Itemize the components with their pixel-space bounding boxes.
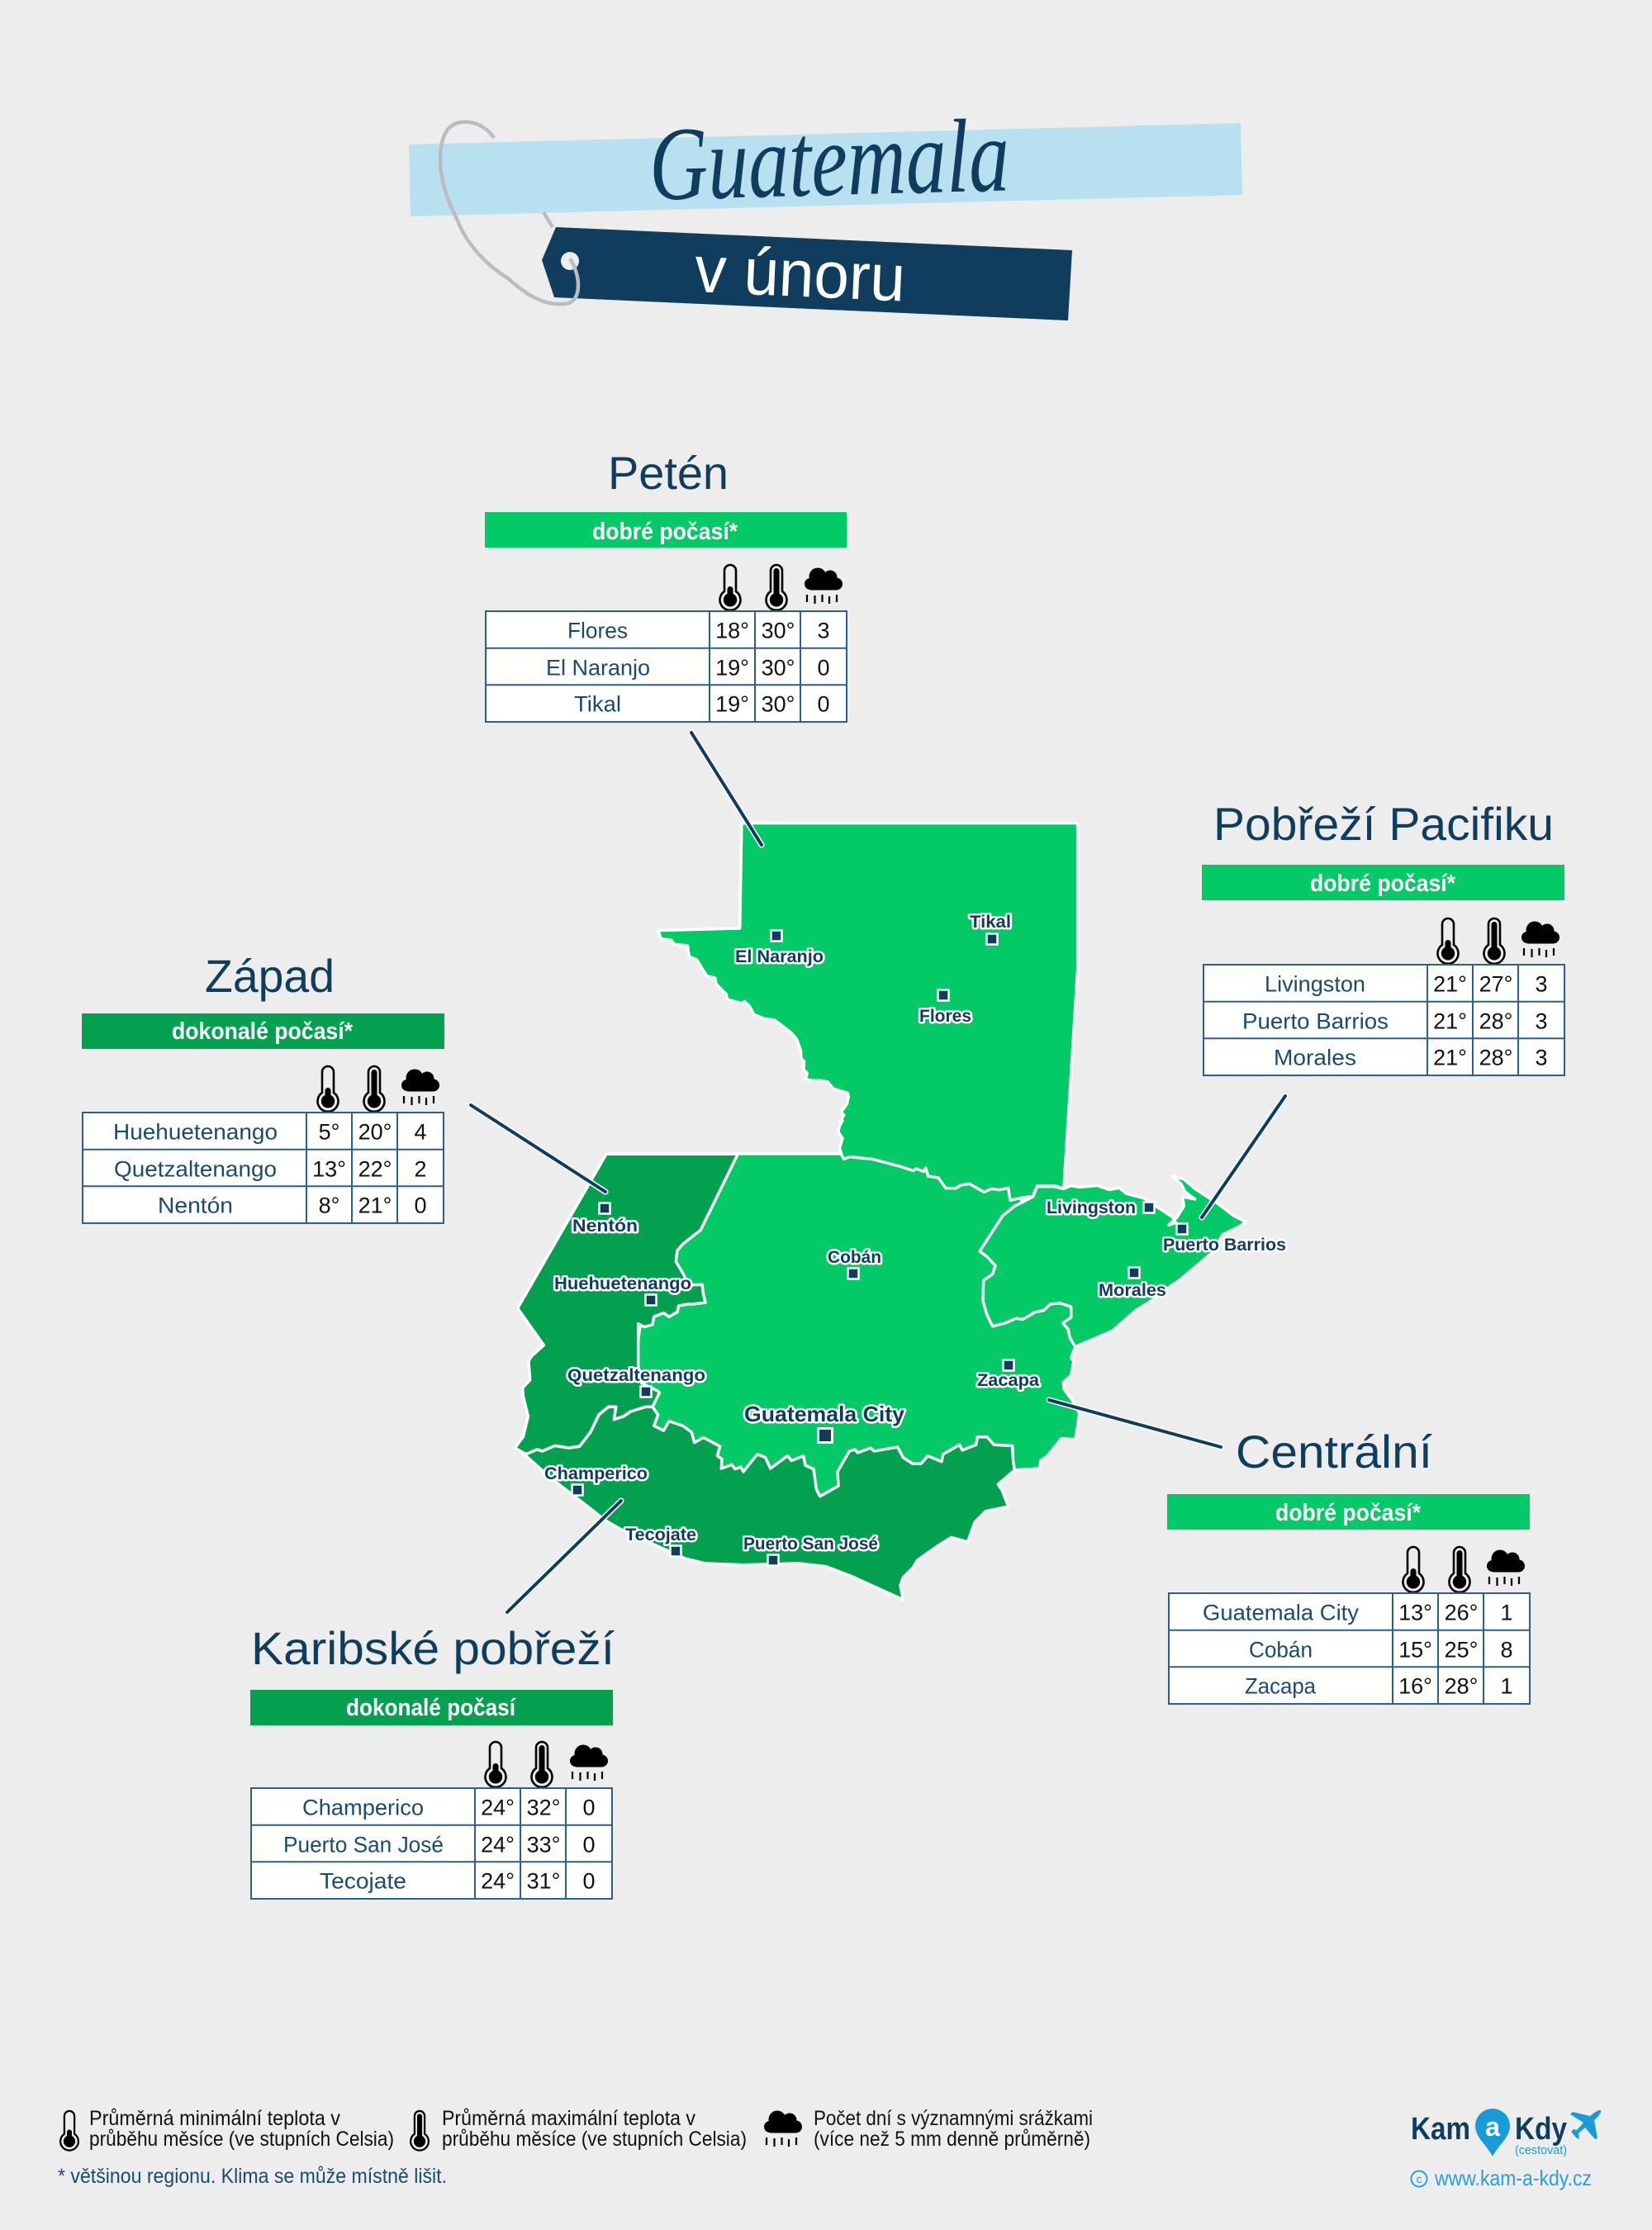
table: Guatemala City (1203, 1600, 1360, 1625)
table: Flores (567, 618, 628, 643)
table: 18° (715, 618, 749, 643)
marker: Cobán (847, 1269, 859, 1279)
table: 28° (1445, 1673, 1478, 1698)
table: Morales (1274, 1045, 1356, 1070)
table: Livingston (1265, 971, 1365, 996)
legend: rainy days (764, 2107, 1093, 2151)
label: Tecojate: Tecojate (625, 1525, 696, 1544)
table: 5° (319, 1119, 339, 1144)
copyright and website: c (1416, 2172, 1422, 2185)
table: 28° (1479, 1045, 1512, 1070)
legend: maximum temperature: průběhu měsíce (ve stupních Celsia) (442, 2128, 747, 2151)
icon: airplane (1570, 2110, 1601, 2139)
heading: Centrální: Centrální (1236, 1426, 1432, 1478)
tag string (440, 122, 578, 304)
icon: map pin (1475, 2109, 1510, 2156)
table: 3 (1535, 1008, 1548, 1033)
table (83, 1113, 444, 1223)
label: Champerico: Champerico (544, 1464, 648, 1483)
rating bar (1167, 1494, 1530, 1530)
legend: minimum temperature: Průměrná minimální teplota v (89, 2107, 340, 2130)
table: 21° (1433, 971, 1467, 996)
region: Petén (658, 823, 1078, 1200)
table: Zacapa (1245, 1673, 1317, 1698)
table: 30° (762, 691, 795, 716)
table: Quetzaltenango (114, 1156, 277, 1181)
table: 30° (762, 618, 795, 643)
rating text: dobré počasí* (592, 519, 738, 545)
legend: rainy days: (více než 5 mm denně průměrně) (814, 2128, 1090, 2151)
table (251, 1788, 612, 1899)
marker: Tecojate (671, 1546, 681, 1556)
marker: Morales (1128, 1267, 1140, 1279)
price tag (542, 227, 1072, 320)
logo letter: a: a (1485, 2112, 1500, 2142)
label: Quetzaltenango: Quetzaltenango (567, 1366, 705, 1385)
table: Tecojate (320, 1868, 406, 1893)
table: 13° (1398, 1600, 1432, 1625)
icon: rain (570, 1744, 608, 1781)
icon: max temperature (1449, 1547, 1470, 1592)
legend: rainy days: Počet dní s významnými srážkami (814, 2107, 1093, 2130)
table: 25° (1445, 1637, 1478, 1662)
icon: max temperature (532, 1742, 552, 1787)
heading: Pobřeží Pacifiku: Pobřeží Pacifiku (1213, 798, 1554, 850)
region: Centrální (617, 1154, 1085, 1519)
table: 21° (1433, 1045, 1467, 1070)
rating bar (250, 1690, 613, 1725)
icon: max temperature (767, 565, 786, 610)
table: 2 (414, 1156, 427, 1181)
table: 26° (1445, 1600, 1478, 1625)
table: 1 (1500, 1673, 1513, 1698)
table: 15° (1398, 1637, 1432, 1662)
icon: rain (1521, 922, 1559, 957)
title: Guatemala: Guatemala (648, 97, 1011, 223)
table: 0 (582, 1832, 596, 1857)
panel: Karibské pobřeží (250, 1622, 615, 1899)
marker: Guatemala City (818, 1429, 833, 1442)
footnote: * většinou regionu. Klima se může místně lišit. (58, 2165, 447, 2188)
rating text: dokonalé počasí (346, 1695, 516, 1721)
legend: maximum temperature (411, 2107, 747, 2151)
marker: Puerto San José (768, 1554, 778, 1566)
table: 21° (1433, 1008, 1467, 1033)
table: Champerico (302, 1795, 424, 1820)
table: Puerto San José (283, 1832, 444, 1857)
marker: Champerico (572, 1485, 583, 1495)
table: 31° (527, 1868, 560, 1893)
table: 28° (1479, 1008, 1512, 1033)
logo subtext: (cestovat) (1515, 2143, 1567, 2157)
region: Pobřeží Pacifiku (980, 1176, 1246, 1347)
map of Guatemala (515, 823, 1286, 1600)
logo: Kam a Kdy (1411, 2109, 1601, 2190)
label: Guatemala City: Guatemala City (744, 1402, 905, 1426)
legend: minimum temperature: průběhu měsíce (ve stupních Celsia) (89, 2128, 394, 2151)
table: 16° (1398, 1673, 1432, 1698)
table: 27° (1479, 971, 1512, 996)
table (1203, 965, 1564, 1075)
leader line: Západ (471, 1105, 605, 1192)
marker: Nentón (600, 1203, 610, 1214)
icon: max temperature (1483, 918, 1505, 964)
marker: Huehuetenango (646, 1295, 656, 1305)
table: El Naranjo (546, 655, 650, 680)
region: Západ (515, 1154, 738, 1454)
table: Cobán (1249, 1637, 1313, 1662)
label: Puerto Barrios: Puerto Barrios (1163, 1236, 1286, 1255)
icon: rain (1487, 1549, 1525, 1586)
label: El Naranjo: El Naranjo (735, 947, 824, 966)
leader line: Pobřeží Pacifiku (1202, 1096, 1285, 1217)
marker: Puerto Barrios (1176, 1224, 1188, 1234)
marker: Flores (938, 989, 948, 1001)
table: Tikal (574, 691, 621, 716)
table: 8 (1500, 1637, 1513, 1662)
table: 32° (527, 1795, 560, 1820)
heading: Karibské pobřeží: Karibské pobřeží (251, 1622, 615, 1674)
marker: Tikal (986, 933, 998, 945)
table: 3 (817, 618, 830, 643)
table: 0 (582, 1795, 596, 1820)
label: Flores: Flores (919, 1007, 971, 1026)
table: Huehuetenango (113, 1119, 278, 1144)
table: 30° (762, 655, 795, 680)
legend (58, 2107, 1093, 2188)
heading: Západ: Západ (205, 950, 335, 1002)
icon: min temperature (720, 565, 740, 610)
label: Morales: Morales (1099, 1281, 1166, 1300)
label: Nentón: Nentón (572, 1217, 638, 1236)
rating text: dobré počasí* (1310, 871, 1456, 897)
label: Tikal: Tikal (970, 913, 1011, 932)
table: 8° (319, 1193, 339, 1217)
icon: max temperature (363, 1066, 385, 1112)
label: Huehuetenango: Huehuetenango (554, 1274, 691, 1293)
table: 19° (715, 691, 749, 716)
icon: min temperature (1403, 1547, 1424, 1592)
table: 19° (715, 655, 749, 680)
tag hole (561, 252, 579, 270)
panel: Centrální (1167, 1426, 1530, 1704)
title ribbon (409, 123, 1242, 216)
title block (409, 97, 1242, 320)
table: Nentón (158, 1193, 233, 1217)
table: 1 (1500, 1600, 1513, 1625)
leader line: Karibské pobřeží (507, 1501, 621, 1612)
table: 0 (414, 1193, 427, 1217)
table: 24° (481, 1868, 515, 1893)
table: 33° (527, 1832, 560, 1857)
icon: rain (805, 568, 843, 604)
logo word: Kdy: Kdy (1515, 2112, 1567, 2147)
label: Zacapa: Zacapa (977, 1371, 1039, 1390)
rating text: dokonalé počasí* (172, 1018, 354, 1045)
rating bar (1202, 865, 1564, 900)
copyright and website: www.kam-a-kdy.cz (1434, 2166, 1592, 2190)
panel: Západ (82, 950, 444, 1223)
leader line: Centrální (1049, 1400, 1221, 1447)
marker: El Naranjo (771, 930, 781, 942)
legend: minimum temperature (60, 2107, 394, 2151)
rating text: dobré počasí* (1275, 1500, 1422, 1526)
heading: Petén: Petén (608, 447, 729, 499)
icon: min temperature (486, 1742, 506, 1787)
icon: min temperature (1437, 918, 1459, 964)
table: 24° (481, 1795, 515, 1820)
table: 0 (817, 655, 830, 680)
table: 21° (358, 1193, 392, 1217)
table (1169, 1593, 1530, 1704)
legend: maximum temperature: Průměrná maximální teplota v (442, 2107, 695, 2130)
panel: Pobřeží Pacifiku (1202, 798, 1564, 1075)
table: 13° (312, 1156, 346, 1181)
table: Puerto Barrios (1242, 1008, 1389, 1033)
subtitle: v únoru: v únoru (693, 232, 907, 316)
panel: Petén (485, 447, 847, 722)
table: 0 (817, 691, 830, 716)
rating bar (485, 512, 847, 548)
table: 20° (358, 1119, 392, 1144)
table: 0 (582, 1868, 596, 1893)
table: 24° (481, 1832, 515, 1857)
table: 22° (358, 1156, 392, 1181)
label: Cobán: Cobán (828, 1248, 881, 1267)
label: Puerto San José: Puerto San José (743, 1535, 878, 1554)
marker: Quetzaltenango (641, 1386, 651, 1397)
table: 4 (414, 1119, 427, 1144)
table: 3 (1535, 971, 1548, 996)
marker: Zacapa (1003, 1359, 1014, 1371)
label: Livingston: Livingston (1047, 1198, 1136, 1217)
leader line: Petén (691, 733, 762, 845)
marker: Livingston (1143, 1203, 1155, 1212)
icon: min temperature (317, 1066, 339, 1112)
region: Karibské pobřeží (515, 1407, 1014, 1600)
icon: rain (401, 1069, 439, 1105)
logo word: Kam: Kam (1411, 2112, 1470, 2147)
table: 3 (1535, 1045, 1548, 1070)
table (486, 611, 847, 722)
rating bar (82, 1013, 444, 1049)
